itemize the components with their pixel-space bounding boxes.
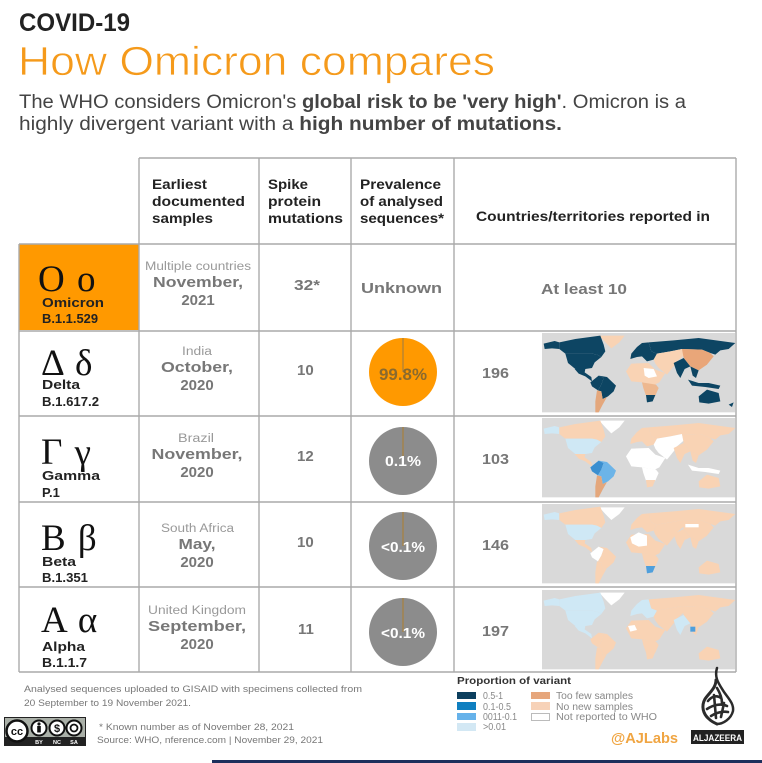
gamma samples: November,	[152, 446, 242, 463]
delta name: B.1.617.2	[42, 394, 99, 409]
subtitle text: The WHO considers Omicron's global risk to be 'very high' . Omicron is a	[19, 92, 686, 113]
gamma symbol: Γ γ	[41, 432, 91, 473]
icon: creative commons badge: cc	[11, 726, 23, 738]
legend: proportion of variant: 0011-0.1	[483, 712, 517, 723]
beta pie chart	[369, 512, 437, 580]
delta samples: 2020	[180, 377, 214, 394]
gamma samples: Brazil	[178, 433, 214, 445]
alpha samples	[148, 605, 246, 653]
gamma mutations: 12	[297, 448, 314, 465]
beta name: Beta	[42, 554, 77, 569]
row: gamma	[41, 418, 735, 500]
legend: proportion of variant: >0.01	[483, 722, 506, 733]
beta pie chart: <0.1%	[381, 539, 425, 556]
omicron samples: November,	[153, 274, 243, 291]
table header	[152, 177, 710, 226]
header: earliest documented samples	[152, 177, 245, 226]
delta name	[42, 377, 99, 409]
legend: proportion of variant: Too few samples	[556, 691, 633, 702]
alpha samples: 2020	[180, 636, 214, 653]
icon: creative commons badge: NC	[53, 740, 61, 746]
delta name: Delta	[42, 377, 81, 392]
alpha samples: United Kingdom	[148, 605, 246, 617]
delta map	[542, 333, 735, 412]
header: spike protein mutations: mutations	[268, 211, 343, 226]
omicron countries: At least 10	[541, 281, 627, 298]
table grid	[19, 158, 736, 672]
omicron symbol: Ο ο	[38, 259, 95, 300]
header: countries reported: Countries/territories reported in	[476, 209, 710, 224]
source note: Source: WHO, nference.com | November 29, 2021	[97, 735, 323, 746]
beta map	[542, 504, 735, 583]
icon: al jazeera logo	[691, 668, 744, 744]
icon: creative commons badge: SA	[70, 740, 78, 746]
omicron name: Omicron	[42, 295, 104, 310]
header: prevalence of analysed sequences: Prevalence	[360, 177, 442, 192]
title: COVID-19: COVID-19	[19, 9, 130, 37]
alpha map	[542, 590, 735, 669]
header: earliest documented samples: Earliest	[152, 177, 208, 192]
row: beta	[41, 504, 735, 585]
gamma samples: 2020	[180, 464, 214, 481]
footnote: analysed sequences: 20 September to 19 November 2021.	[24, 698, 191, 709]
alpha countries: 197	[482, 623, 509, 640]
omicron name: B.1.1.529	[42, 311, 98, 326]
beta name	[42, 554, 88, 585]
icon: al jazeera logo: ALJAZEERA	[693, 733, 742, 743]
footnote: analysed sequences	[24, 684, 362, 709]
source note: * Known number as of November 28, 2021	[99, 722, 294, 733]
omicron samples	[145, 261, 251, 309]
icon: creative commons badge: $	[54, 723, 60, 735]
legend: proportion of variant: 0.1-0.5	[483, 702, 511, 713]
delta samples: October,	[161, 359, 233, 376]
legend: proportion of variant	[457, 675, 657, 733]
delta pie chart: 99.8%	[379, 365, 427, 384]
row: delta	[41, 333, 735, 412]
alpha symbol: Α α	[41, 600, 97, 641]
delta samples	[161, 346, 233, 394]
gamma name	[42, 468, 101, 500]
beta mutations: 10	[297, 534, 314, 551]
gamma map	[542, 418, 735, 497]
delta countries: 196	[482, 365, 509, 382]
alpha samples: September,	[148, 618, 246, 635]
gamma samples	[152, 433, 242, 481]
beta samples: 2020	[180, 554, 214, 571]
header: spike protein mutations: protein	[268, 194, 321, 209]
header: prevalence of analysed sequences: of analysed	[360, 194, 443, 209]
gamma countries: 103	[482, 451, 509, 468]
beta name: B.1.351	[42, 570, 88, 585]
icon: creative commons badge: BY	[35, 740, 43, 746]
footnote: analysed sequences: Analysed sequences uploaded to GISAID with specimens collected from	[24, 684, 362, 695]
icon: creative commons badge	[4, 717, 86, 746]
legend: proportion of variant: 0.5-1	[483, 691, 503, 702]
legend: proportion of variant: Proportion of variant	[457, 675, 572, 687]
beta countries: 146	[482, 537, 509, 554]
row: alpha	[41, 590, 735, 670]
gamma name: Gamma	[42, 468, 101, 483]
row: omicron	[38, 259, 627, 326]
header: prevalence of analysed sequences	[360, 177, 445, 226]
beta samples: South Africa	[161, 523, 235, 535]
gamma pie chart: 0.1%	[385, 453, 421, 470]
alpha mutations: 11	[298, 621, 314, 638]
delta symbol: Δ δ	[41, 343, 92, 384]
delta mutations: 10	[297, 362, 314, 379]
bottom band	[212, 760, 762, 763]
subtitle text: highly divergent variant with a high number of mutations.	[19, 114, 562, 135]
header: spike protein mutations	[268, 177, 343, 226]
beta symbol: Β β	[41, 518, 97, 559]
delta samples: India	[182, 346, 213, 358]
gamma pie chart	[369, 427, 437, 495]
header: earliest documented samples: samples	[152, 211, 213, 226]
omicron samples: 2021	[181, 292, 215, 309]
omicron highlighted cell	[19, 244, 139, 330]
beta samples	[161, 523, 235, 571]
gamma name: P.1	[42, 485, 60, 500]
omicron prevalence: Unknown	[361, 280, 442, 297]
legend: proportion of variant: Not reported to WHO	[556, 712, 657, 723]
delta pie chart	[369, 338, 437, 406]
alpha pie chart: <0.1%	[381, 625, 425, 642]
heading: How Omicron compares: How Omicron compares	[18, 38, 495, 84]
legend: proportion of variant: No new samples	[556, 702, 633, 713]
alpha pie chart	[369, 598, 437, 666]
omicron name	[42, 295, 104, 326]
subtitle text	[19, 92, 686, 135]
alpha name: B.1.1.7	[42, 655, 87, 670]
header: spike protein mutations: Spike	[268, 177, 309, 192]
omicron samples: Multiple countries	[145, 261, 251, 273]
header: prevalence of analysed sequences: sequences*	[360, 211, 445, 226]
source note	[97, 722, 323, 746]
handle: @AJLabs: @AJLabs	[611, 730, 678, 747]
alpha name: Alpha	[42, 639, 86, 654]
header: earliest documented samples: documented	[152, 194, 245, 209]
omicron mutations: 32*	[294, 277, 320, 294]
beta samples: May,	[178, 536, 216, 553]
alpha name	[42, 639, 87, 670]
